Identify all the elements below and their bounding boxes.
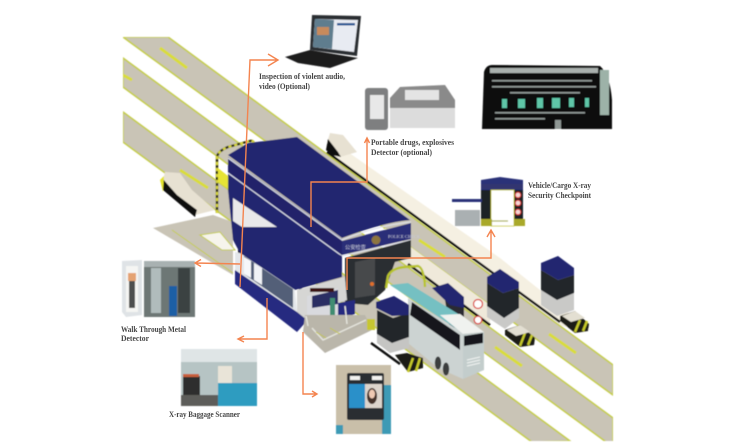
yellow ramp block: [218, 168, 233, 192]
bus white roof: [440, 314, 484, 334]
bumper 4: [560, 311, 589, 333]
left barrier: [160, 172, 215, 217]
orange arrows: [195, 54, 495, 397]
top barrier: [326, 133, 357, 157]
island between lanes near booths: [385, 228, 490, 325]
rear grille: [467, 357, 480, 366]
roads and scene: [122, 15, 613, 447]
left plaza: [153, 215, 233, 275]
booth 2: [432, 283, 464, 330]
lower wall: [235, 270, 305, 332]
entrance passage: [345, 240, 411, 305]
infographic: [121, 14, 614, 442]
face recognition terminal photo: [336, 365, 391, 434]
label: walk through metal detector: Detector: [121, 334, 149, 343]
arrow: to portable detector: [311, 138, 370, 227]
yellow-black arch left: [217, 141, 254, 213]
glow indicator: [370, 282, 374, 286]
bumper 3 cap: [507, 325, 530, 336]
navy lower block: [338, 300, 355, 320]
black kerbs: [327, 152, 560, 364]
arrow: to walk-through detector: [195, 260, 240, 266]
lane 3: [123, 112, 570, 442]
bumper 3 stripes: [520, 333, 532, 346]
vehicle X-ray scan image: [482, 65, 612, 129]
side dark column: [238, 240, 243, 270]
cream island strip: [327, 150, 590, 330]
bus windows: [410, 302, 460, 350]
yellow post: [367, 319, 375, 330]
person: [330, 298, 335, 317]
band between stripes: [228, 157, 342, 256]
windows: [244, 256, 293, 308]
lane 1: [123, 37, 613, 395]
speed signs: [474, 300, 482, 324]
arrow: to vehicle checkpoint: [347, 230, 495, 290]
checkpoint icon: [452, 177, 525, 226]
police label: POLICE CHECK: [388, 234, 421, 239]
booth 3: [487, 269, 519, 329]
label: portable detector: Detector (optional): [371, 148, 432, 157]
bus rear: [463, 332, 484, 379]
walk-through detector photo: [122, 260, 195, 317]
label: audio video inspection: video (Optional): [259, 82, 310, 91]
portable detector: [365, 85, 455, 130]
laptop: [285, 15, 361, 68]
lane arrows: [123, 48, 576, 366]
lane 2: [123, 58, 613, 447]
booth 4: [541, 256, 574, 316]
label: x-ray baggage scanner: X-ray Baggage Scanner: [169, 410, 240, 419]
roads: [123, 37, 613, 447]
bus side: [408, 298, 463, 379]
arrow: to laptop: [240, 54, 278, 287]
label: vehicle checkpoint: [528, 181, 592, 200]
label: portable detector: Portable drugs, explosives: [371, 138, 455, 147]
emblem: [372, 236, 380, 244]
label: walk through metal detector: Walk Through Metal: [121, 325, 187, 334]
platform: [303, 315, 372, 353]
LED sign: [310, 288, 334, 292]
grey upper band: [233, 198, 277, 227]
label: walk through metal detector: [121, 325, 187, 343]
label: portable detector: [371, 138, 455, 157]
bumper 4 cap: [562, 311, 585, 322]
building: [228, 137, 421, 353]
bus: [390, 283, 484, 379]
label: vehicle checkpoint: Security Checkpoint: [528, 191, 591, 200]
fascia band: [342, 223, 411, 255]
booth 1: [376, 296, 409, 353]
bumper 4 stripes: [575, 320, 587, 332]
bus teal roof: [390, 283, 463, 333]
plaza markings: [172, 230, 235, 273]
railings: [306, 306, 366, 340]
entrance opening: [307, 288, 338, 322]
entrance wall: [297, 277, 347, 320]
arrow: to baggage scanner: [238, 298, 267, 342]
bumper 1: [395, 353, 423, 372]
arrow: to face terminal: [303, 332, 317, 397]
fascia text: 公安检查: [345, 243, 366, 251]
yellow-black arch over lane: [386, 266, 425, 288]
wheels: [435, 356, 441, 370]
lower roof: [233, 222, 342, 290]
arch dashes: [217, 141, 254, 213]
rear window: [464, 333, 483, 346]
bumper 3: [505, 325, 535, 347]
entrance frame: [355, 258, 375, 298]
window band: [235, 252, 297, 312]
opening dark top: [312, 290, 338, 308]
upper roof: [228, 137, 410, 238]
bumper 1 stripes: [408, 358, 420, 372]
upper roof stripes: [228, 158, 411, 256]
rail yellow marks: [316, 328, 340, 338]
window highlights: [244, 257, 251, 278]
x-ray baggage scanner photo: [181, 349, 257, 406]
upper wall: [228, 173, 342, 290]
label: audio video inspection: [259, 72, 345, 91]
label: audio video inspection: Inspection of violent audio,: [259, 72, 345, 81]
label: vehicle checkpoint: Vehicle/Cargo X-ray: [528, 181, 592, 190]
